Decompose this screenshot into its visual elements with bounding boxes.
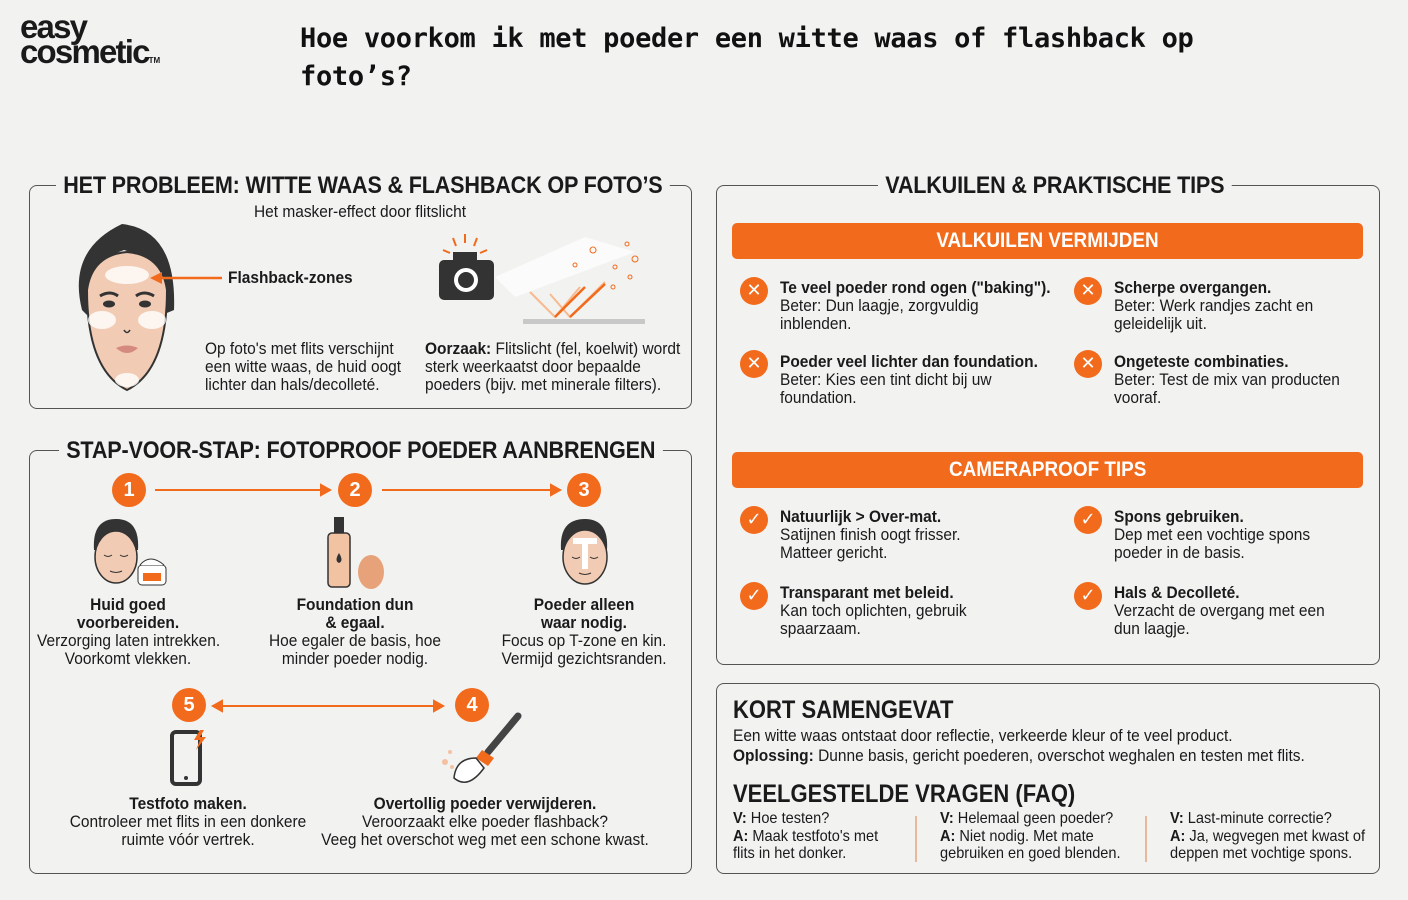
valkuilen items: ✕ bbox=[1080, 353, 1096, 374]
faq columns: V: Helemaal geen poeder? bbox=[940, 810, 1113, 827]
valkuilen items: Te veel poeder rond ogen ("baking"). bbox=[780, 278, 1051, 297]
tips items: Verzacht de overgang met een bbox=[1114, 601, 1325, 620]
faq columns: deppen met vochtige spons. bbox=[1170, 845, 1352, 862]
step 1 text: Voorkomt vlekken. bbox=[65, 649, 191, 668]
step 3 text: Poeder alleen bbox=[534, 595, 634, 614]
step 3 text: Vermijd gezichtsranden. bbox=[501, 649, 667, 668]
valkuilen items: Beter: Dun laagje, zorgvuldig bbox=[780, 296, 979, 315]
bar: cameraproof tips: CAMERAPROOF TIPS bbox=[949, 458, 1146, 481]
step numbers and arrows: 3 bbox=[578, 479, 590, 501]
arrow: flashback zones bbox=[150, 272, 222, 284]
bar: valkuilen vermijden: VALKUILEN VERMIJDEN bbox=[936, 229, 1159, 252]
text: samenvatting: Een witte waas ontstaat door reflectie, verkeerde kleur of te veel product. bbox=[733, 726, 1233, 745]
tips items: Satijnen finish oogt frisser. bbox=[780, 525, 961, 544]
step 4 text bbox=[321, 794, 649, 849]
subtitle: Het masker-effect door flitslicht bbox=[254, 202, 466, 221]
step 1 text: Huid goed bbox=[90, 595, 166, 614]
step 3 text: waar nodig. bbox=[541, 613, 627, 632]
valkuilen items: geleidelijk uit. bbox=[1114, 314, 1207, 333]
tips items: Spons gebruiken. bbox=[1114, 507, 1244, 526]
step 5 text: ruimte vóór vertrek. bbox=[121, 830, 255, 849]
step numbers and arrows bbox=[112, 473, 601, 722]
step 4 text: Veeg het overschot weg met een schone kwast. bbox=[321, 830, 649, 849]
heading: probleem: HET PROBLEEM: WITTE WAAS & FLASHBACK OP FOTO’S bbox=[63, 172, 663, 199]
valkuilen items: Beter: Werk randjes zacht en bbox=[1114, 296, 1313, 315]
valkuilen items: inblenden. bbox=[780, 314, 851, 333]
title: Hoe voorkom ik met poeder een witte waas of flashback op bbox=[300, 23, 1194, 54]
step 2 text bbox=[269, 595, 441, 668]
tips items: ✓ bbox=[746, 509, 762, 530]
faq columns: A: Niet nodig. Met mate bbox=[940, 828, 1094, 844]
icon: foundation bottle bbox=[327, 517, 384, 589]
text: probleem bbox=[205, 339, 401, 394]
faq columns: V: Last-minute correctie? bbox=[1170, 810, 1332, 827]
valkuilen items: ✕ bbox=[746, 280, 762, 301]
valkuilen items bbox=[740, 277, 1340, 407]
tips items: ✓ bbox=[1080, 585, 1096, 606]
text: probleem: Op foto's met flits verschijnt bbox=[205, 339, 394, 358]
text: samenvatting bbox=[733, 726, 1305, 765]
icon: face with t-zone bbox=[560, 519, 608, 585]
faq columns: V: Hoe testen? bbox=[733, 810, 829, 827]
logo: cosmeticTM bbox=[20, 33, 160, 70]
step numbers and arrows: 5 bbox=[183, 694, 195, 716]
heading: faq: VEELGESTELDE VRAGEN (FAQ) bbox=[733, 780, 1075, 808]
bar: valkuilen vermijden bbox=[732, 223, 1363, 259]
title bbox=[300, 23, 1194, 92]
tips items bbox=[740, 506, 1325, 638]
valkuilen items: Poeder veel lichter dan foundation. bbox=[780, 352, 1038, 371]
panel: probleem bbox=[29, 185, 692, 409]
text: oorzaak: poeders (bijv. met minerale filters). bbox=[425, 375, 661, 394]
step 2 text: & egaal. bbox=[325, 613, 385, 632]
step 2 text: Hoe egaler de basis, hoe bbox=[269, 631, 441, 650]
step numbers and arrows: 1 bbox=[123, 479, 135, 501]
logo bbox=[20, 8, 160, 70]
heading: stappen: STAP-VOOR-STAP: FOTOPROOF POEDER AANBRENGEN bbox=[66, 437, 655, 464]
tips items: dun laagje. bbox=[1114, 619, 1190, 638]
step numbers and arrows: 2 bbox=[349, 479, 361, 501]
label: flashback zones: Flashback-zones bbox=[228, 268, 353, 287]
panel: stappen bbox=[29, 450, 692, 874]
step 1 text: voorbereiden. bbox=[77, 613, 179, 632]
valkuilen items: foundation. bbox=[780, 388, 857, 407]
step numbers and arrows: 4 bbox=[466, 694, 478, 716]
faq columns bbox=[733, 810, 1366, 862]
tips items: ✓ bbox=[1080, 509, 1096, 530]
bar: cameraproof tips bbox=[732, 452, 1363, 488]
tips items: Hals & Decolleté. bbox=[1114, 583, 1240, 602]
heading: kort samengevat: KORT SAMENGEVAT bbox=[733, 696, 953, 724]
step 5 text: Testfoto maken. bbox=[129, 794, 247, 813]
icon: phone flash bbox=[170, 730, 206, 786]
tips items: Matteer gericht. bbox=[780, 543, 887, 562]
valkuilen items: vooraf. bbox=[1114, 388, 1161, 407]
text: probleem: een witte waas, de huid oogt bbox=[205, 357, 401, 376]
tips items: Kan toch oplichten, gebruik bbox=[780, 601, 967, 620]
valkuilen items: Beter: Test de mix van producten bbox=[1114, 370, 1340, 389]
step 4 text: Overtollig poeder verwijderen. bbox=[374, 794, 596, 813]
step 3 text bbox=[501, 595, 667, 668]
step 3 text: Focus op T-zone en kin. bbox=[502, 631, 666, 650]
tips items: poeder in de basis. bbox=[1114, 543, 1245, 562]
tips items: Dep met een vochtige spons bbox=[1114, 525, 1310, 544]
step 2 text: minder poeder nodig. bbox=[282, 649, 428, 668]
text: oorzaak: sterk weerkaatst door bepaalde bbox=[425, 357, 641, 376]
logo: easy bbox=[20, 8, 86, 45]
valkuilen items: ✕ bbox=[746, 353, 762, 374]
step 1 text: Verzorging laten intrekken. bbox=[37, 631, 220, 650]
title: foto’s? bbox=[300, 61, 412, 92]
valkuilen items: ✕ bbox=[1080, 280, 1096, 301]
panel: samenvatting en faq bbox=[716, 683, 1380, 874]
panel: valkuilen en tips bbox=[716, 185, 1380, 665]
icon: face bbox=[78, 224, 174, 392]
text: samenvatting: Oplossing: Dunne basis, gericht poederen, overschot weghalen en testen met flits. bbox=[733, 746, 1305, 765]
text: oorzaak bbox=[425, 339, 680, 394]
text: oorzaak: Oorzaak: Flitslicht (fel, koelwit) wordt bbox=[425, 339, 680, 358]
tips items: spaarzaam. bbox=[780, 619, 861, 638]
text: probleem: lichter dan hals/decolleté. bbox=[205, 375, 380, 394]
icon: camera reflection bbox=[439, 234, 645, 324]
faq columns: flits in het donker. bbox=[733, 845, 846, 862]
valkuilen items: Scherpe overgangen. bbox=[1114, 278, 1271, 297]
faq columns: gebruiken en goed blenden. bbox=[940, 845, 1121, 862]
tips items: Transparant met beleid. bbox=[780, 583, 954, 602]
icon: face with cream bbox=[94, 519, 166, 586]
icon: brush bbox=[442, 712, 522, 783]
step 1 text bbox=[37, 595, 220, 668]
faq columns: A: Maak testfoto's met bbox=[733, 828, 878, 844]
valkuilen items: Ongeteste combinaties. bbox=[1114, 352, 1289, 371]
valkuilen items: Beter: Kies een tint dicht bij uw bbox=[780, 370, 992, 389]
step 2 text: Foundation dun bbox=[297, 595, 413, 614]
tips items: Natuurlijk > Over-mat. bbox=[780, 507, 941, 526]
faq columns: A: Ja, wegvegen met kwast of bbox=[1170, 828, 1365, 844]
heading: valkuilen: VALKUILEN & PRAKTISCHE TIPS bbox=[885, 172, 1224, 199]
step 4 text: Veroorzaakt elke poeder flashback? bbox=[362, 812, 608, 831]
tips items: ✓ bbox=[746, 585, 762, 606]
step 5 text: Controleer met flits in een donkere bbox=[70, 812, 306, 831]
step 5 text bbox=[70, 794, 306, 849]
